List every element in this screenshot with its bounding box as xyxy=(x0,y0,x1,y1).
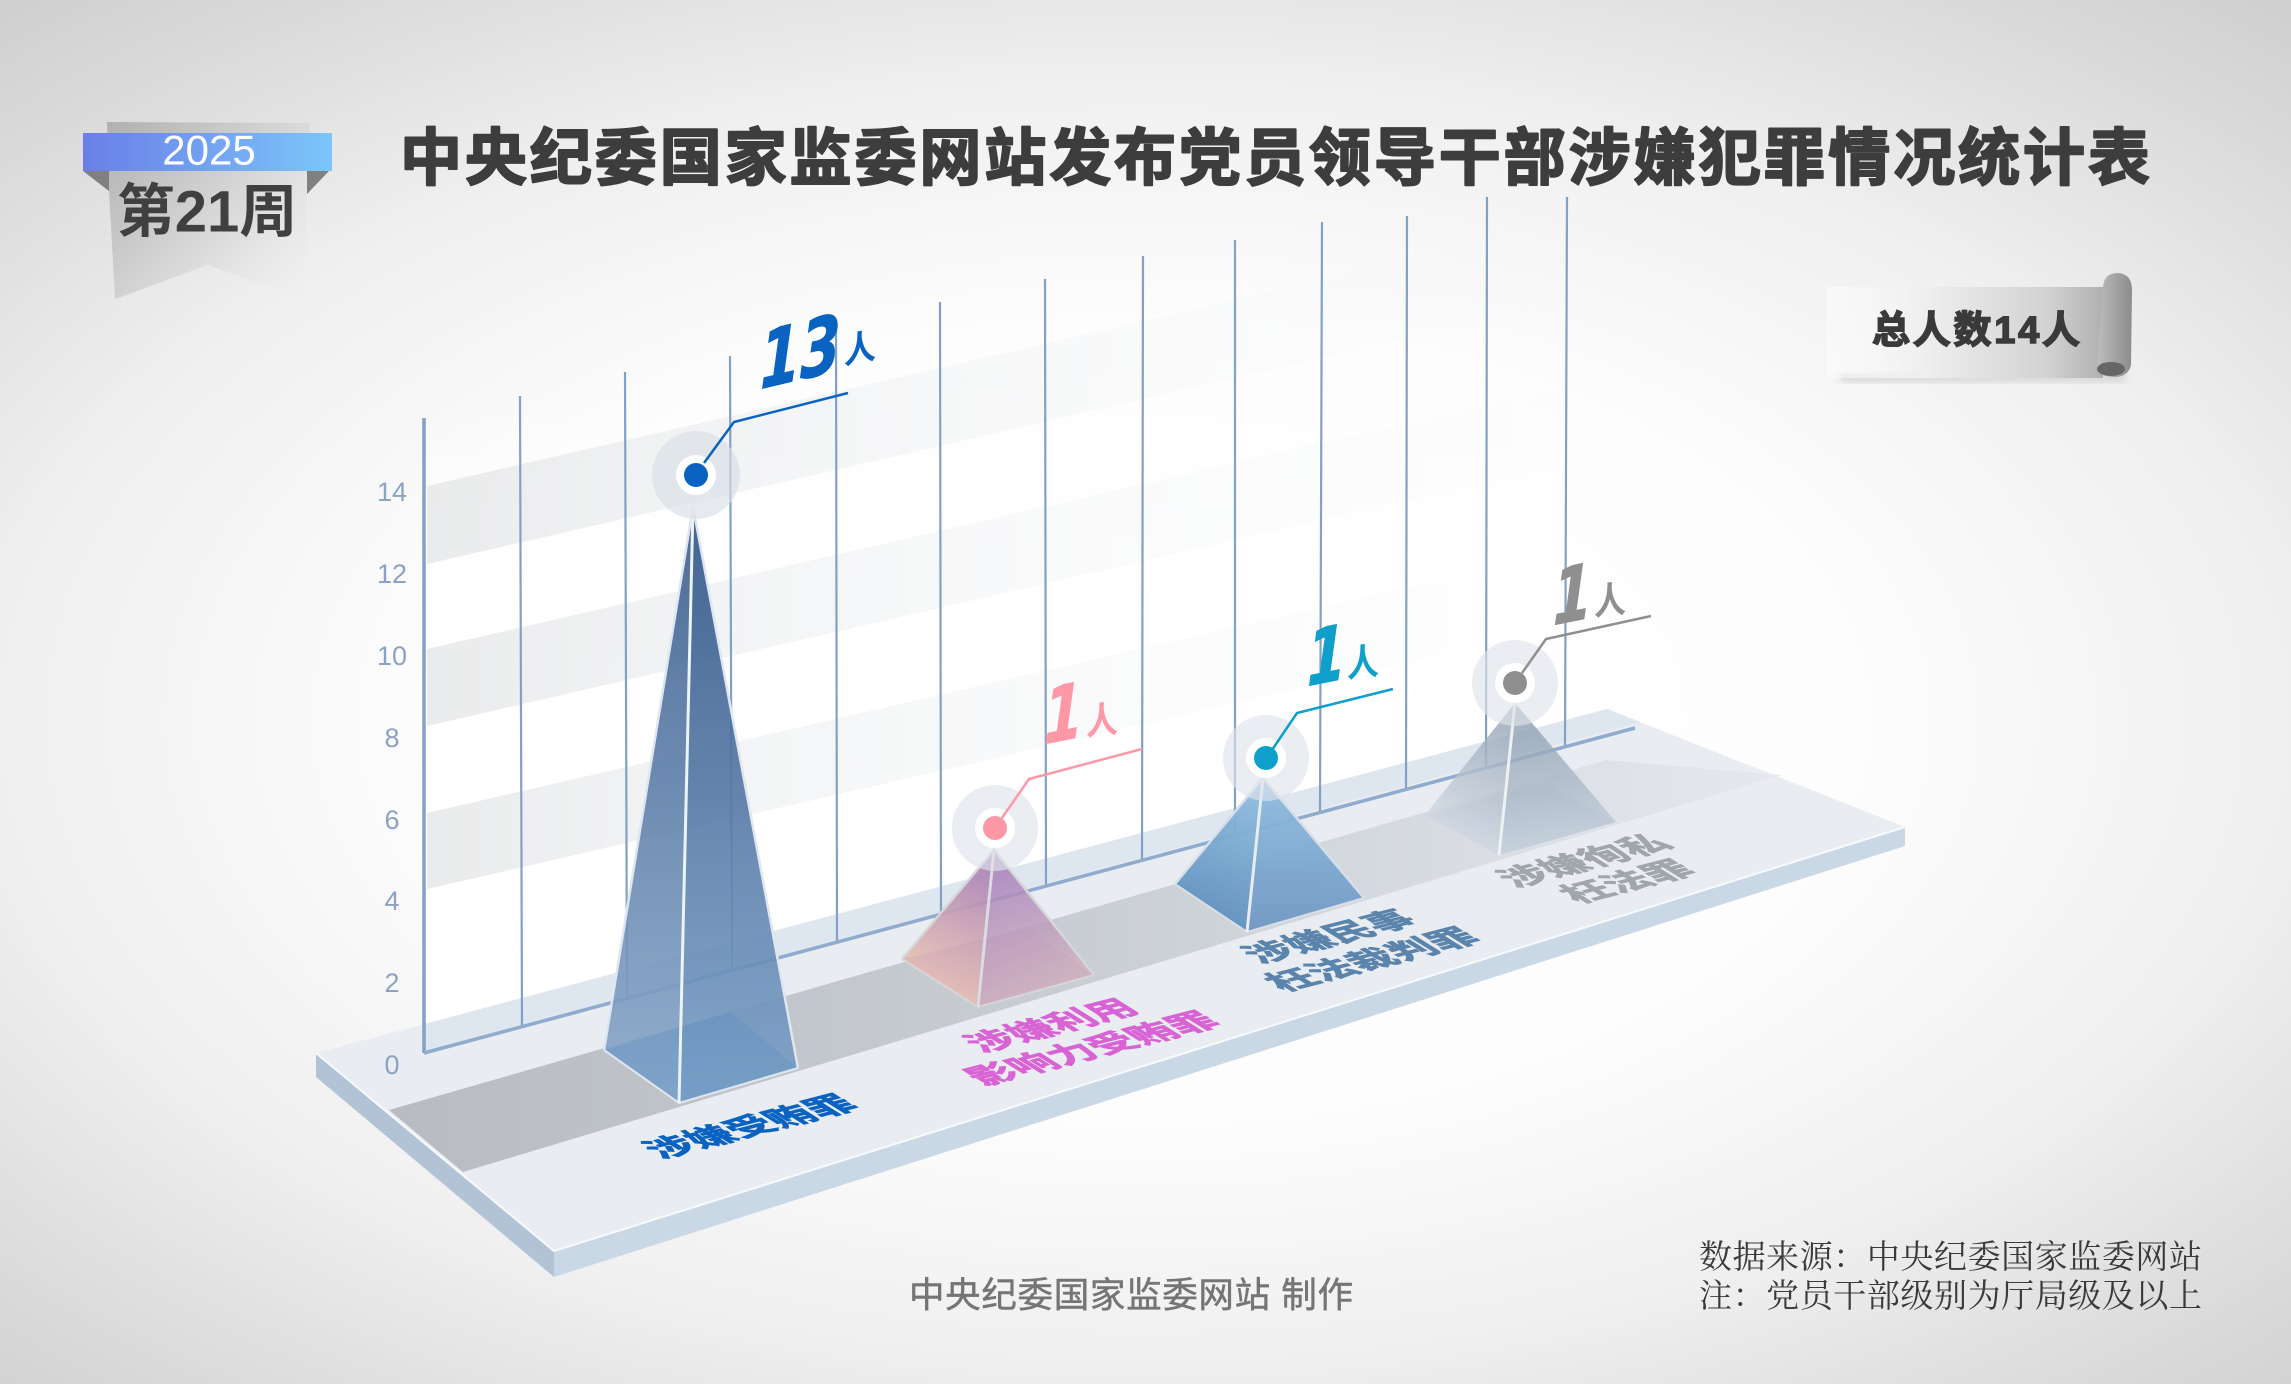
source and note: 注：党员干部级别为厅局级及以上 xyxy=(1699,1278,2202,1315)
source and note: 数据来源：中央纪委国家监委网站 xyxy=(1699,1239,2202,1276)
pyramid: 涉嫌民事枉法裁判罪 1人 xyxy=(1175,778,1364,932)
marker and value: grey 1人 xyxy=(1472,547,1651,726)
ribbon bar xyxy=(83,133,332,171)
badge: week ribbon xyxy=(83,122,332,300)
floor label: 涉嫌利用影响力受贿罪: 影响力受贿罪 xyxy=(956,1008,1230,1090)
pyramid: 涉嫌受贿罪 13人 xyxy=(604,507,798,1103)
marker and value: 13人: 13 xyxy=(760,297,841,408)
marker and value: pink 1人: 人 xyxy=(1086,700,1118,744)
floor label: 涉嫌徇私枉法罪: 枉法罪 xyxy=(1551,856,1705,908)
marker and value: 13人 xyxy=(652,297,876,519)
platform top xyxy=(316,709,1905,1251)
marker and value: teal 1人 xyxy=(1223,608,1393,801)
floor label: 涉嫌民事枉法裁判罪: 枉法裁判罪 xyxy=(1256,924,1490,996)
week number: 第21周 xyxy=(117,180,297,244)
marker and value: pink 1人 xyxy=(952,666,1142,871)
y axis labels: 2 xyxy=(384,968,400,998)
floor grey band xyxy=(389,760,1782,1172)
marker and value: teal 1人: 人 xyxy=(1347,642,1379,686)
scroll: total count xyxy=(1827,273,2132,381)
count text: 总人数14人 xyxy=(1872,310,2080,352)
banner body xyxy=(107,122,310,300)
paper xyxy=(1827,287,2103,378)
floor label: 涉嫌徇私枉法罪: 涉嫌徇私 xyxy=(1488,830,1682,892)
marker and value: teal 1人: 1 xyxy=(1307,608,1346,704)
y axis labels: 14 xyxy=(377,477,407,507)
y axis labels: 4 xyxy=(384,886,400,916)
y axis labels: 0 xyxy=(384,1050,400,1080)
marker and value: pink 1人: 1 xyxy=(1044,666,1083,762)
ribbon folds xyxy=(83,171,109,191)
title: 中央纪委国家监委网站发布党员领导干部涉嫌犯罪情况统计表 xyxy=(400,124,2150,194)
y axis labels: 12 xyxy=(377,559,407,589)
marker and value: 13人: 人 xyxy=(844,326,876,372)
y axis labels: 6 xyxy=(384,805,400,835)
wall stripes xyxy=(427,224,1565,889)
footer credit: 中央纪委国家监委网站 制作 xyxy=(909,1275,1353,1315)
panel: 3D floor platform xyxy=(316,709,1905,1277)
platform front side xyxy=(554,826,1905,1277)
marker and value: grey 1人: 人 xyxy=(1594,580,1626,624)
roll xyxy=(2097,273,2132,377)
year: 2025 xyxy=(162,126,256,174)
marker and value: grey 1人: 1 xyxy=(1553,547,1592,643)
panel: chart back wall xyxy=(424,197,1567,1053)
floor tint behind wall xyxy=(424,709,1640,1053)
pyramid: 涉嫌徇私枉法罪 1人 xyxy=(1425,703,1616,855)
y axis labels xyxy=(377,477,407,1080)
source and note xyxy=(1699,1239,2202,1315)
y axis labels: 8 xyxy=(384,723,400,753)
floor label: 涉嫌利用影响力受贿罪: 涉嫌利用 xyxy=(955,995,1149,1057)
floor label: 涉嫌民事枉法裁判罪: 涉嫌民事 xyxy=(1233,906,1427,968)
pyramid: 涉嫌利用影响力受贿罪 1人 xyxy=(902,850,1094,1007)
floor label: 涉嫌受贿罪: 涉嫌受贿罪 xyxy=(634,1091,868,1163)
chart grid: vertical lines and baseline xyxy=(424,197,1635,1053)
platform left side xyxy=(316,1053,554,1277)
y axis labels: 10 xyxy=(377,641,407,671)
